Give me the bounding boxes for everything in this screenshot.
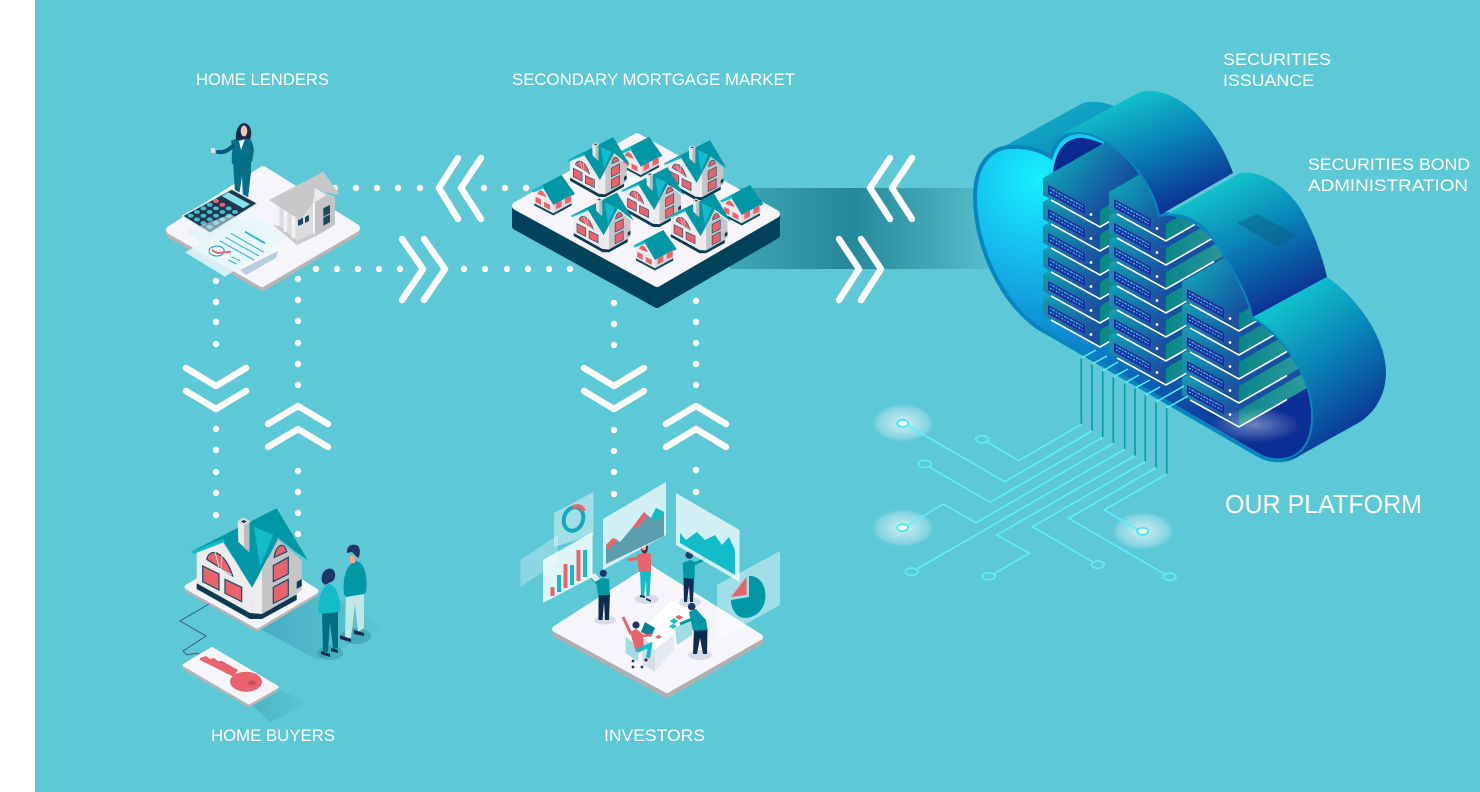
panel: area mountain <box>603 482 666 570</box>
market houses <box>532 137 763 270</box>
arrow: platform to market <box>870 158 912 219</box>
person with tablet <box>590 570 616 624</box>
glowing halos <box>872 404 1174 550</box>
panel: bars <box>543 532 593 603</box>
cloud lobe 2 <box>1060 91 1233 215</box>
cloud rim <box>975 132 1313 460</box>
lobe 3 shadow patch <box>1237 214 1297 247</box>
buyer couple <box>317 545 371 660</box>
connector band: market to platform <box>730 188 1000 269</box>
dotted connector: market to lenders <box>332 185 529 191</box>
heading: our platform: OUR PLATFORM <box>1225 489 1422 519</box>
house <box>191 508 308 619</box>
heading: securities issuance: SECURITIES <box>1223 50 1331 69</box>
illustration: home lenders <box>170 123 356 287</box>
investors platform <box>555 568 760 695</box>
investor team back row <box>590 542 706 624</box>
illustration: cloud platform <box>975 91 1386 460</box>
chart panels <box>520 482 780 640</box>
key <box>200 656 262 692</box>
cloud interior face <box>975 132 1313 460</box>
server stack 3 <box>1182 243 1307 427</box>
arrow: market to platform <box>839 239 881 300</box>
heading: securities bond administration: ADMINISTRATION <box>1308 176 1468 195</box>
meeting desk <box>640 600 697 672</box>
illustration: investors <box>520 482 780 695</box>
panel: donut <box>554 492 594 547</box>
connecting wire <box>180 604 209 656</box>
heading: home lenders: HOME LENDERS <box>196 70 329 89</box>
server stack 1 <box>1043 142 1140 348</box>
panel: blank <box>520 535 558 587</box>
key plate <box>184 648 277 706</box>
lender woman <box>211 123 253 198</box>
lender platform <box>170 170 356 287</box>
server stack 2 <box>1109 174 1224 386</box>
illustration: secondary mortgage market <box>516 137 776 304</box>
arrow: investors up to market <box>666 406 726 447</box>
heading: investors: INVESTORS <box>604 726 705 745</box>
trace lines <box>905 424 1176 580</box>
illustration: home buyers <box>180 508 385 722</box>
glowing nodes <box>897 420 1148 535</box>
heading: secondary mortgage market: SECONDARY MORTGAGE MARKET <box>512 70 795 89</box>
dotted connector: lenders to market <box>313 266 573 272</box>
man pointing <box>679 551 706 607</box>
server stacks <box>1043 138 1307 443</box>
cloud back lobe <box>1003 102 1119 157</box>
cloud lobe 3 <box>1167 173 1327 317</box>
heading: securities bond administration: SECURITIES BOND <box>1308 155 1470 174</box>
heading: home buyers: HOME BUYERS <box>211 726 335 745</box>
woman presenter <box>628 542 659 604</box>
dotted connector: market to investors <box>611 300 617 497</box>
panel: pie <box>717 551 780 640</box>
standing man <box>675 603 712 660</box>
ground shadows <box>250 594 385 722</box>
heading: securities issuance: ISSUANCE <box>1223 71 1314 90</box>
house platform <box>187 550 316 629</box>
cloud lobe 4 <box>1253 277 1386 460</box>
dotted connector: lenders to buyers <box>213 278 219 518</box>
arrow: lenders down to buyers <box>186 368 246 409</box>
circuit traces <box>872 350 1188 580</box>
cloud connectors <box>1081 350 1188 408</box>
market platform <box>516 137 776 304</box>
document <box>185 214 287 277</box>
dotted connector: investors to market <box>693 298 699 495</box>
bank building <box>269 172 340 245</box>
arrow: lenders to market <box>402 239 445 300</box>
calculator <box>182 189 258 233</box>
vertical data lines <box>1081 358 1167 474</box>
seated person <box>623 617 652 668</box>
dotted connector: buyers to lenders <box>295 276 301 537</box>
arrow: market to lenders <box>439 158 481 219</box>
arrow: buyers up to lenders <box>268 406 328 447</box>
panel: cyan area <box>676 493 740 582</box>
arrow: market down to investors <box>584 368 644 409</box>
